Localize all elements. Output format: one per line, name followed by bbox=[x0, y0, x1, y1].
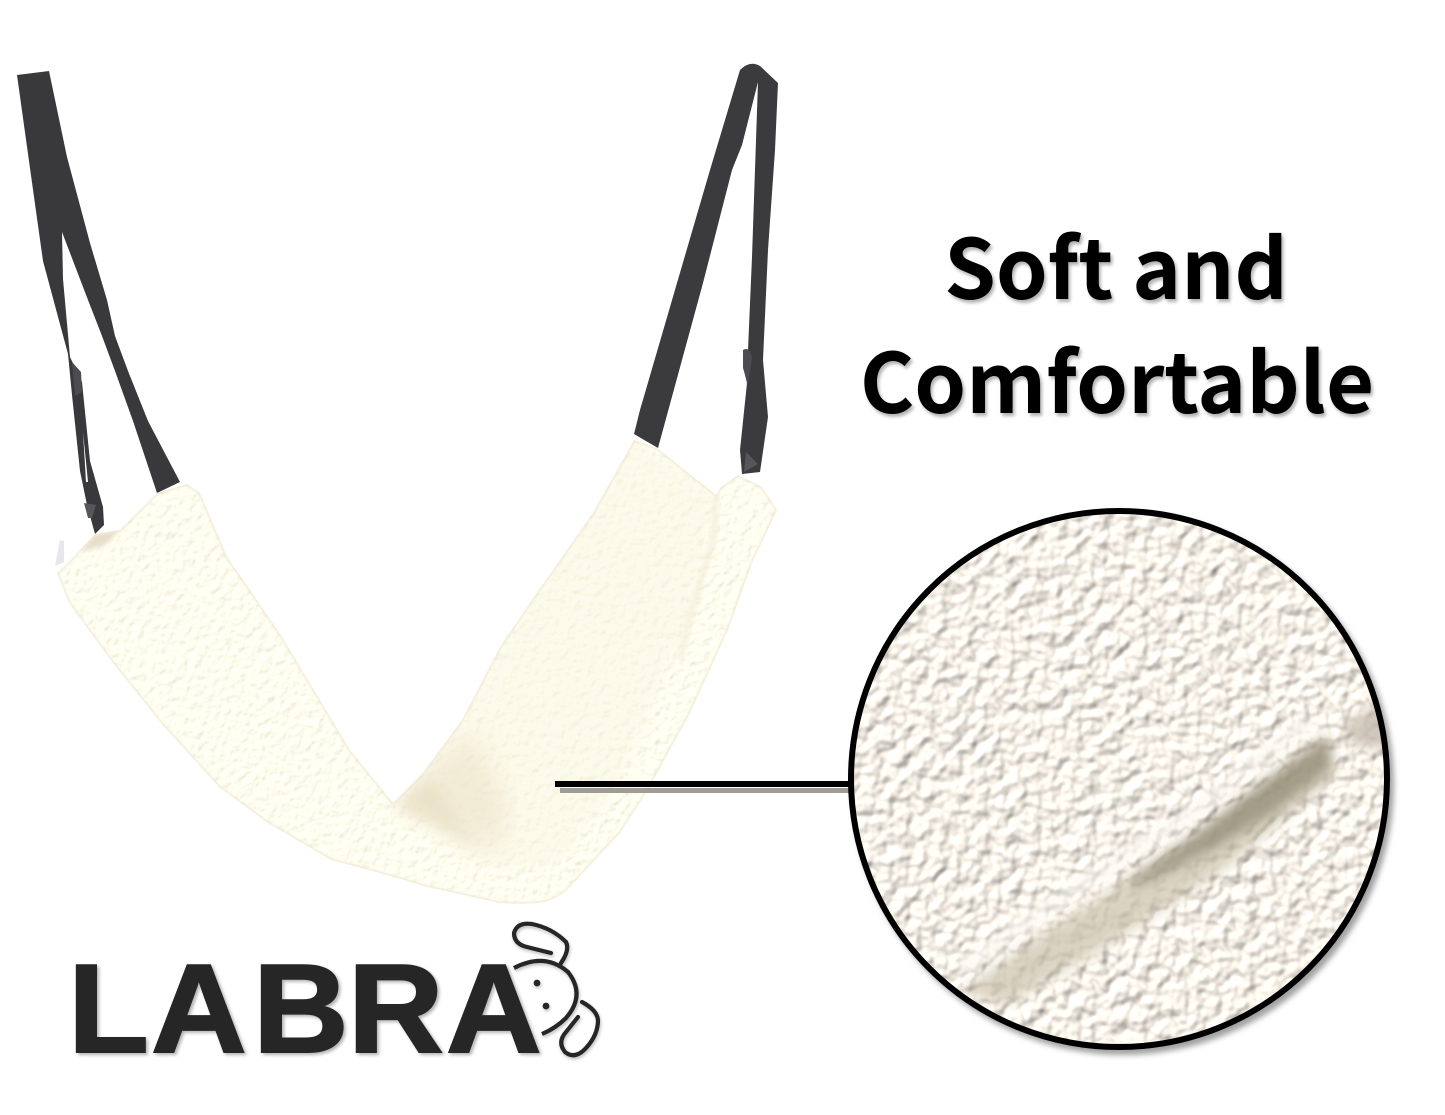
crease shadow bbox=[960, 690, 1400, 1005]
fold shading bbox=[57, 440, 777, 904]
heading bbox=[860, 203, 1374, 437]
left strap bbox=[17, 71, 180, 534]
magnified fleece circle bbox=[845, 505, 1400, 1055]
heading: Soft and bbox=[944, 203, 1288, 323]
hammock product photo bbox=[17, 64, 790, 920]
right strap bbox=[634, 64, 778, 474]
heading: Comfortable bbox=[860, 317, 1374, 437]
fleece body bbox=[40, 430, 790, 920]
logo: LABRA bbox=[68, 924, 598, 1079]
logo wordmark: LABRA bbox=[68, 939, 542, 1079]
icon: dog head bbox=[514, 924, 598, 1055]
callout line bbox=[555, 781, 850, 793]
tag bbox=[55, 540, 64, 566]
